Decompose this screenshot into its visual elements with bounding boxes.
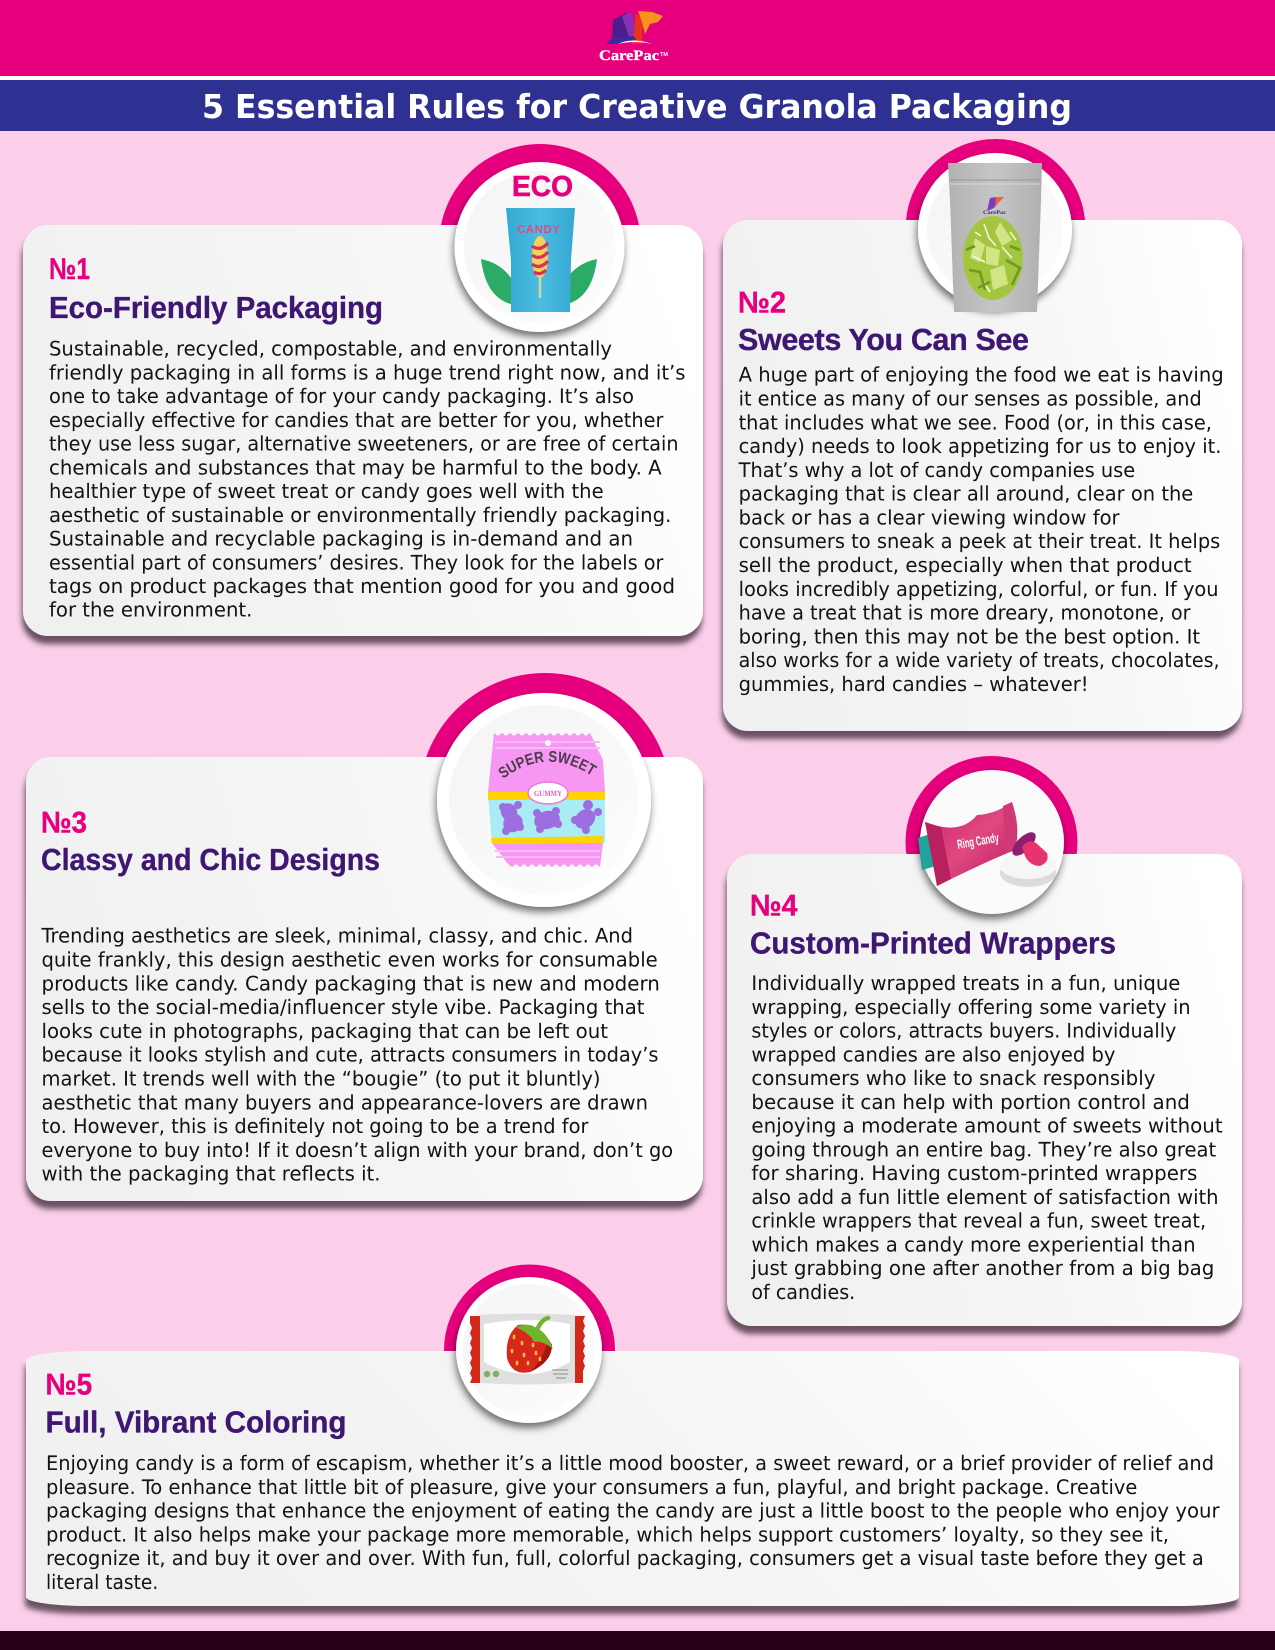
text block: for the environment. — [49, 598, 252, 622]
text block: aesthetic that many buyers and appearance-lovers are drawn — [42, 1090, 648, 1114]
icon: gummy candy bag badge: GUMMY — [534, 789, 562, 798]
text block: A huge part of enjoying the food we eat is having — [739, 363, 1224, 387]
text block: Trending aesthetics are sleek, minimal, classy, and chic. And — [41, 924, 633, 948]
text block: friendly packaging in all forms is a huge trend right now, and it’s — [49, 360, 686, 384]
icon: strawberry wrapper badge — [456, 1277, 602, 1423]
panel: rule 1 eco-friendly packaging — [23, 144, 703, 636]
text block — [750, 971, 1223, 1304]
text block: chemicals and substances that may be harmful to the body. A — [49, 455, 662, 479]
text block: for sharing. Having custom-printed wrappers — [751, 1161, 1197, 1185]
text block: essential part of consumers’ desires. They look for the labels or — [49, 550, 664, 574]
icon: gummy candy bag badge — [430, 692, 656, 918]
text block: because it looks stylish and cute, attracts consumers in today’s — [42, 1043, 658, 1067]
text block: wrapped candies are also enjoyed by — [751, 1042, 1116, 1066]
footer band — [0, 1631, 1275, 1650]
text block: consumers to sneak a peek at their treat. It helps — [739, 529, 1220, 553]
text block: with the packaging that reflects it. — [42, 1162, 380, 1186]
icon: CarePac bear logo — [599, 11, 668, 64]
text block: tags on product packages that mention good for you and good — [49, 574, 675, 598]
text block: to. However, this is definitely not going to be a trend for — [42, 1114, 589, 1138]
text block: packaging that is clear all around, clear on the — [739, 482, 1193, 506]
text block: product. It also helps make your package more memorable, which helps support customers’ loyalty, so they see it, — [46, 1522, 1169, 1546]
panel: rule 3 classy and chic designs — [20, 673, 706, 1214]
heading: Sweets You Can See — [738, 323, 1029, 357]
panel: rule 2 sweets you can see — [723, 139, 1242, 731]
heading: Eco-Friendly Packaging — [49, 291, 383, 325]
heading: Full, Vibrant Coloring — [46, 1406, 346, 1440]
rule number: №3 — [41, 806, 87, 839]
text block: have a treat that is more dreary, monotone, or — [739, 601, 1191, 625]
heading: Classy and Chic Designs — [41, 843, 380, 877]
text block: enjoying a moderate amount of sweets without — [751, 1114, 1223, 1138]
icon: ring candy wrapper badge: Ring Candy — [956, 830, 1000, 852]
text block: gummies, hard candies – whatever! — [739, 672, 1089, 696]
text block: one to take advantage of for your candy packaging. It’s also — [49, 384, 634, 408]
text block: that includes what we see. Food (or, in this case, — [739, 410, 1212, 434]
title banner — [0, 80, 1275, 131]
text block: boring, then this may not be the best option. It — [739, 624, 1200, 648]
heading: Custom-Printed Wrappers — [750, 926, 1116, 960]
text block: wrapping, especially offering some variety in — [751, 995, 1191, 1019]
text block: recognize it, and buy it over and over. With fun, full, colorful packaging, consumers get a visual taste before they get a — [46, 1546, 1204, 1570]
text block: crinkle wrappers that reveal a fun, sweet treat, — [751, 1209, 1206, 1233]
text block: packaging designs that enhance the enjoyment of eating the candy are just a little boost to the people who enjoy your — [46, 1499, 1220, 1523]
text block — [738, 363, 1224, 696]
text block: Sustainable and recyclable packaging is in-demand and an — [49, 526, 633, 550]
text block: styles or colors, attracts buyers. Individually — [751, 1018, 1177, 1042]
panel: rule 4 custom-printed wrappers — [727, 756, 1242, 1326]
text block: market. It trends well with the “bougie” (to put it bluntly) — [42, 1066, 600, 1090]
icon: gummy candy bag badge: SUPER SWEET — [498, 751, 598, 778]
icon: eco candy pouch badge: CANDY — [517, 224, 560, 236]
text block: sell the product, especially when that product — [739, 553, 1192, 577]
text block: especially effective for candies that are better for you, whether — [49, 408, 664, 432]
rule number: №2 — [738, 286, 786, 319]
icon: clear window pouch badge: CarePac — [983, 210, 1007, 216]
title: 5 Essential Rules for Creative Granola Packaging — [202, 87, 1072, 126]
icon: eco candy pouch badge: ECO — [512, 171, 573, 203]
text block: looks incredibly appetizing, colorful, or fun. If you — [739, 577, 1219, 601]
text block: looks cute in photographs, packaging that can be left out — [42, 1019, 608, 1043]
text block: sells to the social-media/influencer style vibe. Packaging that — [42, 995, 645, 1019]
text block: consumers who like to snack responsibly — [751, 1066, 1156, 1090]
logo wordmark: TM — [660, 52, 668, 58]
icon: ring candy wrapper badge — [918, 770, 1064, 914]
text block: going through an entire bag. They’re also great — [751, 1137, 1216, 1161]
text block: That’s why a lot of candy companies use — [738, 458, 1135, 482]
text block: pleasure. To enhance that little bit of pleasure, give your consumers a fun, playful, and bright package. Creative — [46, 1475, 1137, 1499]
text block — [46, 1451, 1220, 1594]
text block: also works for a wide variety of treats, chocolates, — [739, 648, 1220, 672]
text block: healthier type of sweet treat or candy goes well with the — [49, 479, 604, 503]
text block: Sustainable, recycled, compostable, and environmentally — [49, 337, 612, 361]
text block: Enjoying candy is a form of escapism, whether it’s a little mood booster, a sweet reward, or a brief provider of relief and — [46, 1451, 1214, 1475]
text block: Individually wrapped treats in a fun, unique — [751, 971, 1180, 995]
text block: which makes a candy more experiential than — [751, 1232, 1196, 1256]
text block: they use less sugar, alternative sweeteners, or are free of certain — [49, 432, 678, 456]
icon: clear window pouch badge — [918, 153, 1072, 312]
text block — [49, 337, 686, 622]
gummy bears — [498, 800, 602, 836]
header band with logo — [0, 0, 1275, 80]
text block: everyone to buy into! If it doesn’t align with your brand, don’t go — [42, 1138, 673, 1162]
text block: because it can help with portion control and — [751, 1090, 1190, 1114]
text block: it entice as many of our senses as possible, and — [739, 386, 1202, 410]
text block: back or has a clear viewing window for — [739, 505, 1120, 529]
logo wordmark: CarePac — [599, 48, 660, 64]
text block: aesthetic of sustainable or environmentally friendly packaging. — [49, 503, 671, 527]
text block: literal taste. — [46, 1570, 158, 1594]
rule number: №1 — [49, 253, 90, 286]
text block: products like candy. Candy packaging that is new and modern — [42, 971, 660, 995]
text block: quite frankly, this design aesthetic even works for consumable — [42, 948, 658, 972]
text block: candy) needs to look appetizing for us to enjoy it. — [739, 434, 1221, 458]
text block: of candies. — [751, 1280, 855, 1304]
icon: eco candy pouch badge — [454, 162, 624, 332]
text block: just grabbing one after another from a big bag — [750, 1256, 1214, 1280]
panel: rule 5 full, vibrant coloring — [26, 1264, 1239, 1606]
text block: also add a fun little element of satisfaction with — [751, 1185, 1219, 1209]
rule number: №4 — [750, 889, 798, 922]
rule number: №5 — [46, 1368, 92, 1401]
text block — [41, 924, 673, 1186]
